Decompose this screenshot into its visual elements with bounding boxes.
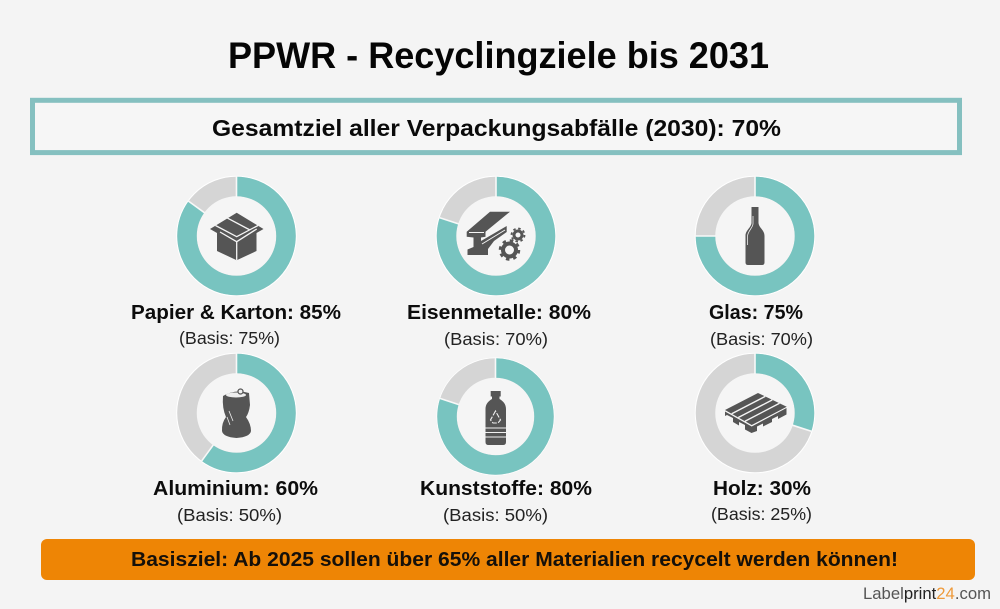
logo: Labelprint24.com: Labelprint24.com xyxy=(863,584,991,603)
overall target text: Gesamtziel aller Verpackungsabfälle (2030): 70% xyxy=(212,115,781,141)
icon: crushed aluminium can xyxy=(222,389,251,438)
donut chart: 80% xyxy=(436,176,556,296)
basis: 50%: (Basis: 50%) xyxy=(443,505,548,525)
donut chart: 75% xyxy=(695,176,815,296)
panel: Aluminium xyxy=(153,353,318,525)
basis: 50%: (Basis: 50%) xyxy=(177,505,282,525)
icon: cardboard box xyxy=(210,213,264,260)
basis: 75%: (Basis: 75%) xyxy=(179,328,280,348)
icon: steel beam and gears xyxy=(467,212,524,260)
panel: Glas xyxy=(695,176,815,349)
icon: glass bottle xyxy=(746,207,764,265)
banner: base target xyxy=(41,539,975,580)
banner text: Basisziel: Ab 2025 sollen über 65% aller Materialien recycelt werden können! xyxy=(131,548,898,571)
basis: 70%: (Basis: 70%) xyxy=(710,329,813,349)
label: Eisenmetalle: Eisenmetalle: 80% xyxy=(407,302,591,324)
label: Holz: Holz: 30% xyxy=(713,478,811,500)
label: Kunststoffe: Kunststoffe: 80% xyxy=(420,478,592,500)
panel: overall target xyxy=(32,100,960,153)
donut chart: 80% xyxy=(437,358,554,475)
donut chart: 85% xyxy=(177,176,296,296)
title: PPWR - Recyclingziele bis 2031 xyxy=(228,35,769,76)
donut chart: 30% xyxy=(695,353,815,473)
panel: Holz xyxy=(695,353,815,524)
label: Papier und Karton: Papier & Karton: 85% xyxy=(131,302,341,324)
icon: wooden pallet xyxy=(725,393,787,433)
panel: Kunststoffe xyxy=(420,358,592,525)
panel: Eisenmetalle xyxy=(407,176,591,349)
label: Glas: Glas: 75% xyxy=(709,302,803,324)
basis: 25%: (Basis: 25%) xyxy=(711,504,812,524)
label: Aluminium: Aluminium: 60% xyxy=(153,478,318,500)
panel: Papier und Karton xyxy=(131,176,341,348)
basis: 70%: (Basis: 70%) xyxy=(444,329,548,349)
donut chart: 60% xyxy=(177,353,296,473)
icon: recyclable plastic bottle xyxy=(486,391,506,445)
